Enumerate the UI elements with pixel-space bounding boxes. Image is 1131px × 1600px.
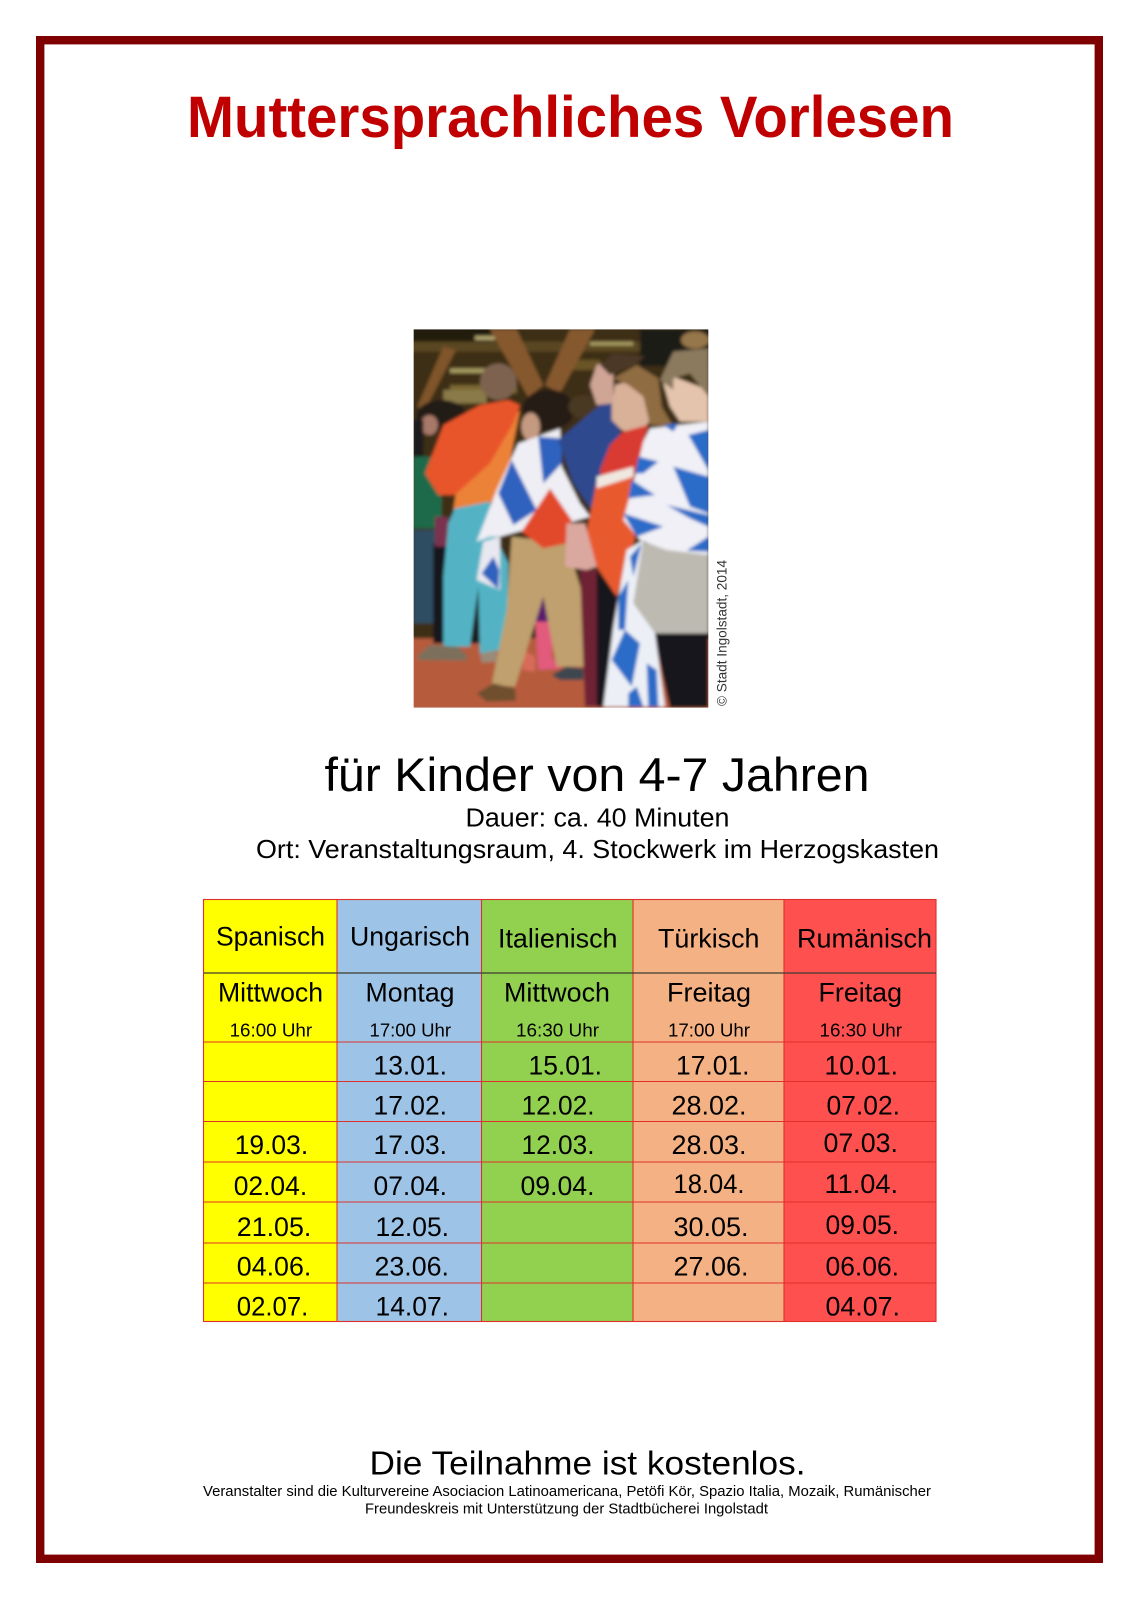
column: Türkisch: 17:00 Uhr [668,1020,750,1041]
column: Rumänisch: Rumänisch [797,924,932,954]
column: Türkisch: Türkisch [658,924,760,954]
column: Italienisch: Mittwoch [504,978,610,1008]
photo: children wrapped in flags [410,327,713,710]
column: Ungarisch: Ungarisch [350,922,470,952]
column: Spanisch: 02.04. [234,1171,307,1201]
column: Rumänisch: 16:30 Uhr [820,1020,902,1041]
column: Türkisch: 28.03. [672,1130,746,1160]
column: Rumänisch: 07.02. [826,1090,900,1120]
column: Türkisch: 30.05. [674,1212,748,1242]
column: Ungarisch: 17.03. [374,1130,447,1160]
location: Ort: Veranstaltungsraum, 4. Stockwerk im Herzogskasten [256,834,939,864]
column: Spanisch: 04.06. [237,1252,311,1282]
column: Spanisch: 02.07. [237,1292,308,1322]
column: Rumänisch: 04.07. [826,1292,900,1322]
navy flag [558,403,621,510]
column: Ungarisch [337,900,482,1322]
free admission note: Die Teilnahme ist kostenlos. [370,1444,806,1482]
column: Ungarisch: 17.02. [374,1090,447,1120]
column: Rumänisch [784,900,936,1322]
subtitle: age group: für Kinder von 4-7 Jahren [324,748,870,801]
column: Spanisch: 21.05. [237,1212,311,1242]
column: Türkisch: 18.04. [674,1169,744,1199]
column: Ungarisch: 23.06. [374,1252,449,1282]
column: Spanisch [204,900,337,1322]
bavarian flag [623,422,708,555]
column: Ungarisch: 17:00 Uhr [370,1020,451,1041]
column: Türkisch: Freitag [667,978,751,1008]
column: Italienisch: Italienisch [498,924,618,954]
column: Italienisch: 16:30 Uhr [516,1020,599,1041]
floor [410,638,713,710]
column: Spanisch: 16:00 Uhr [230,1020,312,1041]
column: Rumänisch: 09.05. [826,1210,899,1240]
column: Italienisch: 12.03. [522,1130,594,1160]
pink boots and purple pants [534,598,549,623]
column: Ungarisch: 07.04. [374,1171,447,1201]
girl one [590,360,613,405]
title: Muttersprachliches Vorlesen [187,85,954,150]
column: Italienisch [482,900,633,1322]
organisers line 2: Freundeskreis mit Unterstützung der Stadtbücherei Ingolstadt [365,1502,768,1518]
girl three [663,377,708,422]
boy [522,389,574,431]
photo credit: © Stadt Ingolstadt, 2014 [714,560,730,706]
column: Italienisch: 09.04. [520,1171,594,1201]
column: Rumänisch: 06.06. [826,1252,899,1282]
column: Spanisch: Mittwoch [218,978,323,1008]
column: Türkisch: 27.06. [674,1252,748,1282]
man [480,363,517,400]
column: Türkisch [633,900,784,1322]
column: Ungarisch: 13.01. [374,1051,447,1081]
column: Rumänisch: Freitag [818,978,902,1008]
column: Rumänisch: 10.01. [824,1051,898,1081]
column: Türkisch: 17.01. [676,1051,750,1081]
organisers line 1: Veranstalter sind die Kulturvereine Asociacion Latinoamericana, Petöfi Kör, Spazio Italia, Mozaik, Rumänischer [203,1484,931,1500]
column: Ungarisch: Montag [366,978,454,1008]
column: Italienisch: 12.02. [522,1090,594,1120]
column: Italienisch: 15.01. [528,1051,602,1081]
left group [417,400,467,432]
schedule table [204,900,936,1322]
grey cardigan and legs [623,542,708,634]
column: Türkisch: 28.02. [672,1090,746,1120]
column: Rumänisch: 11.04. [824,1169,898,1199]
column: Spanisch: 19.03. [235,1130,308,1160]
column: Rumänisch: 07.03. [824,1128,898,1158]
column: Ungarisch: 14.07. [376,1292,449,1322]
girl two [612,380,657,435]
duration: Dauer: ca. 40 Minuten [466,804,730,832]
column: Spanisch: Spanisch [216,922,325,952]
column: Ungarisch: 12.05. [376,1212,449,1242]
